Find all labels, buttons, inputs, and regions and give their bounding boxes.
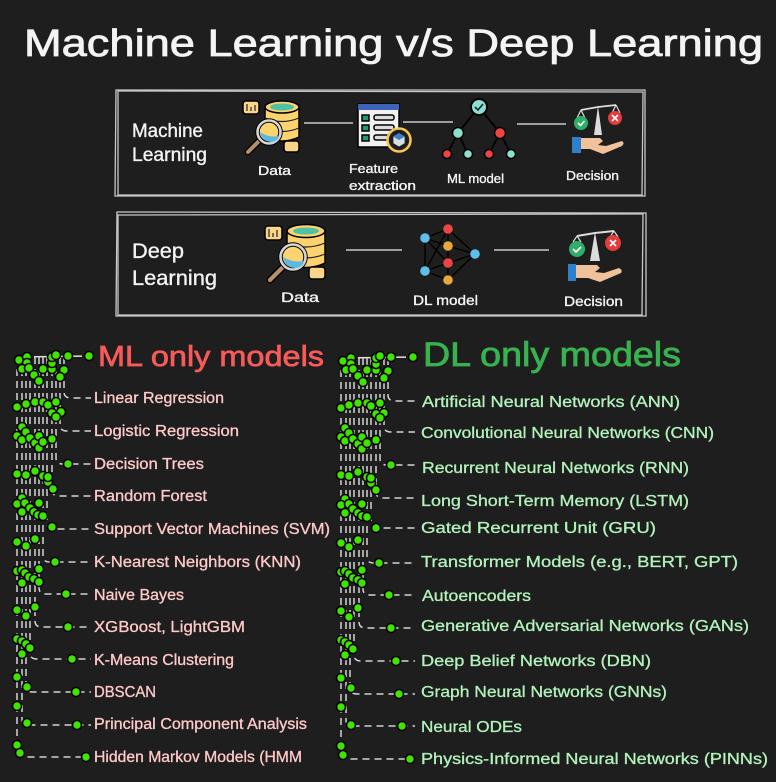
label: decision: Decision	[566, 168, 619, 183]
label: feature extraction: extraction	[349, 179, 416, 193]
list: ml model names: Decision Trees	[94, 456, 204, 473]
arrow: data to feature extraction	[304, 122, 353, 124]
heading: dl only models: DL only models	[423, 336, 681, 374]
node dots: ml tree	[12, 350, 94, 762]
title: Machine Learning v/s Deep Learning	[24, 23, 763, 65]
panel frame: deep learning	[116, 212, 646, 316]
icon: data search	[243, 101, 299, 152]
heading: machine learning: Machine	[132, 121, 203, 142]
list: ml model names: Linear Regression	[94, 390, 224, 407]
icon: decision scale	[568, 231, 622, 282]
list: ml model names: K-Means Clustering	[94, 652, 234, 669]
icon: data search	[265, 224, 325, 280]
list: ml model names: Naive Bayes	[94, 587, 184, 604]
list: dl model names: Artificial Neural Networks (ANN)	[422, 394, 680, 411]
panel: machine learning pipeline	[115, 90, 645, 196]
list: dl model names: Neural ODEs	[421, 719, 522, 736]
label: data: Data	[258, 163, 292, 178]
heading: machine learning: Learning	[132, 145, 207, 166]
label: feature extraction: Feature	[349, 162, 398, 176]
icon: dl network	[420, 224, 480, 285]
list: dl model names: Graph Neural Networks (GNNs)	[421, 684, 667, 701]
arrow: ml model to decision	[517, 123, 566, 125]
tree connectors: dl models	[341, 357, 415, 759]
list: ml model names: Random Forest	[94, 488, 208, 505]
list: ml model names: DBSCAN	[94, 684, 156, 701]
list: ml model names: Hidden Markov Models (HMM	[94, 749, 302, 766]
tree connectors: ml models	[17, 356, 91, 757]
arrow: dl model to decision	[494, 249, 549, 251]
list: dl model names: Transformer Models (e.g., BERT, GPT)	[421, 554, 738, 571]
heading: deep learning	[132, 240, 217, 290]
list: dl model names: Convolutional Neural Networks (CNN)	[421, 425, 714, 442]
heading: deep learning: Learning	[132, 267, 217, 290]
label: decision: Decision	[564, 293, 623, 309]
list: dl model names: Recurrent Neural Networks (RNN)	[422, 460, 689, 477]
label: dl model: DL model	[413, 292, 478, 308]
list: ml model names	[94, 390, 330, 766]
panel: dl only models	[336, 336, 768, 768]
heading: machine learning	[132, 121, 207, 166]
list: dl model names: Autoencoders	[422, 588, 531, 605]
list: ml model names: Support Vector Machines (SVM)	[94, 521, 330, 538]
label: data: Data	[281, 289, 319, 305]
list: ml model names: K-Nearest Neighbors (KNN)	[94, 554, 301, 571]
list: ml model names: XGBoost, LightGBM	[94, 619, 245, 636]
icon: decision scale	[572, 105, 624, 154]
list: dl model names: Generative Adversarial Networks (GANs)	[421, 618, 749, 635]
panel: deep learning pipeline	[116, 212, 646, 316]
icon: feature extraction	[358, 104, 410, 152]
panel: ml only models	[12, 341, 330, 766]
heading: deep learning: Deep	[132, 240, 184, 263]
list: ml model names: Logistic Regression	[94, 423, 239, 440]
list: dl model names: Physics-Informed Neural Networks (PINNs)	[421, 751, 768, 768]
panel frame: machine learning	[115, 90, 645, 196]
list: dl model names: Gated Recurrent Unit (GRU)	[421, 520, 656, 537]
icon: ml model tree	[442, 99, 516, 158]
list: dl model names	[421, 394, 768, 768]
node dots: dl tree	[336, 352, 418, 764]
list: dl model names: Long Short-Term Memory (LSTM)	[421, 493, 689, 510]
label: feature extraction	[349, 162, 416, 193]
arrow: data to dl model	[346, 249, 402, 251]
label: ml model: ML model	[447, 171, 504, 186]
list: dl model names: Deep Belief Networks (DBN)	[421, 653, 651, 670]
arrow: feature extraction to ml model	[403, 121, 453, 123]
heading: ml only models: ML only models	[98, 341, 324, 373]
list: ml model names: Principal Component Analysis	[94, 716, 307, 733]
